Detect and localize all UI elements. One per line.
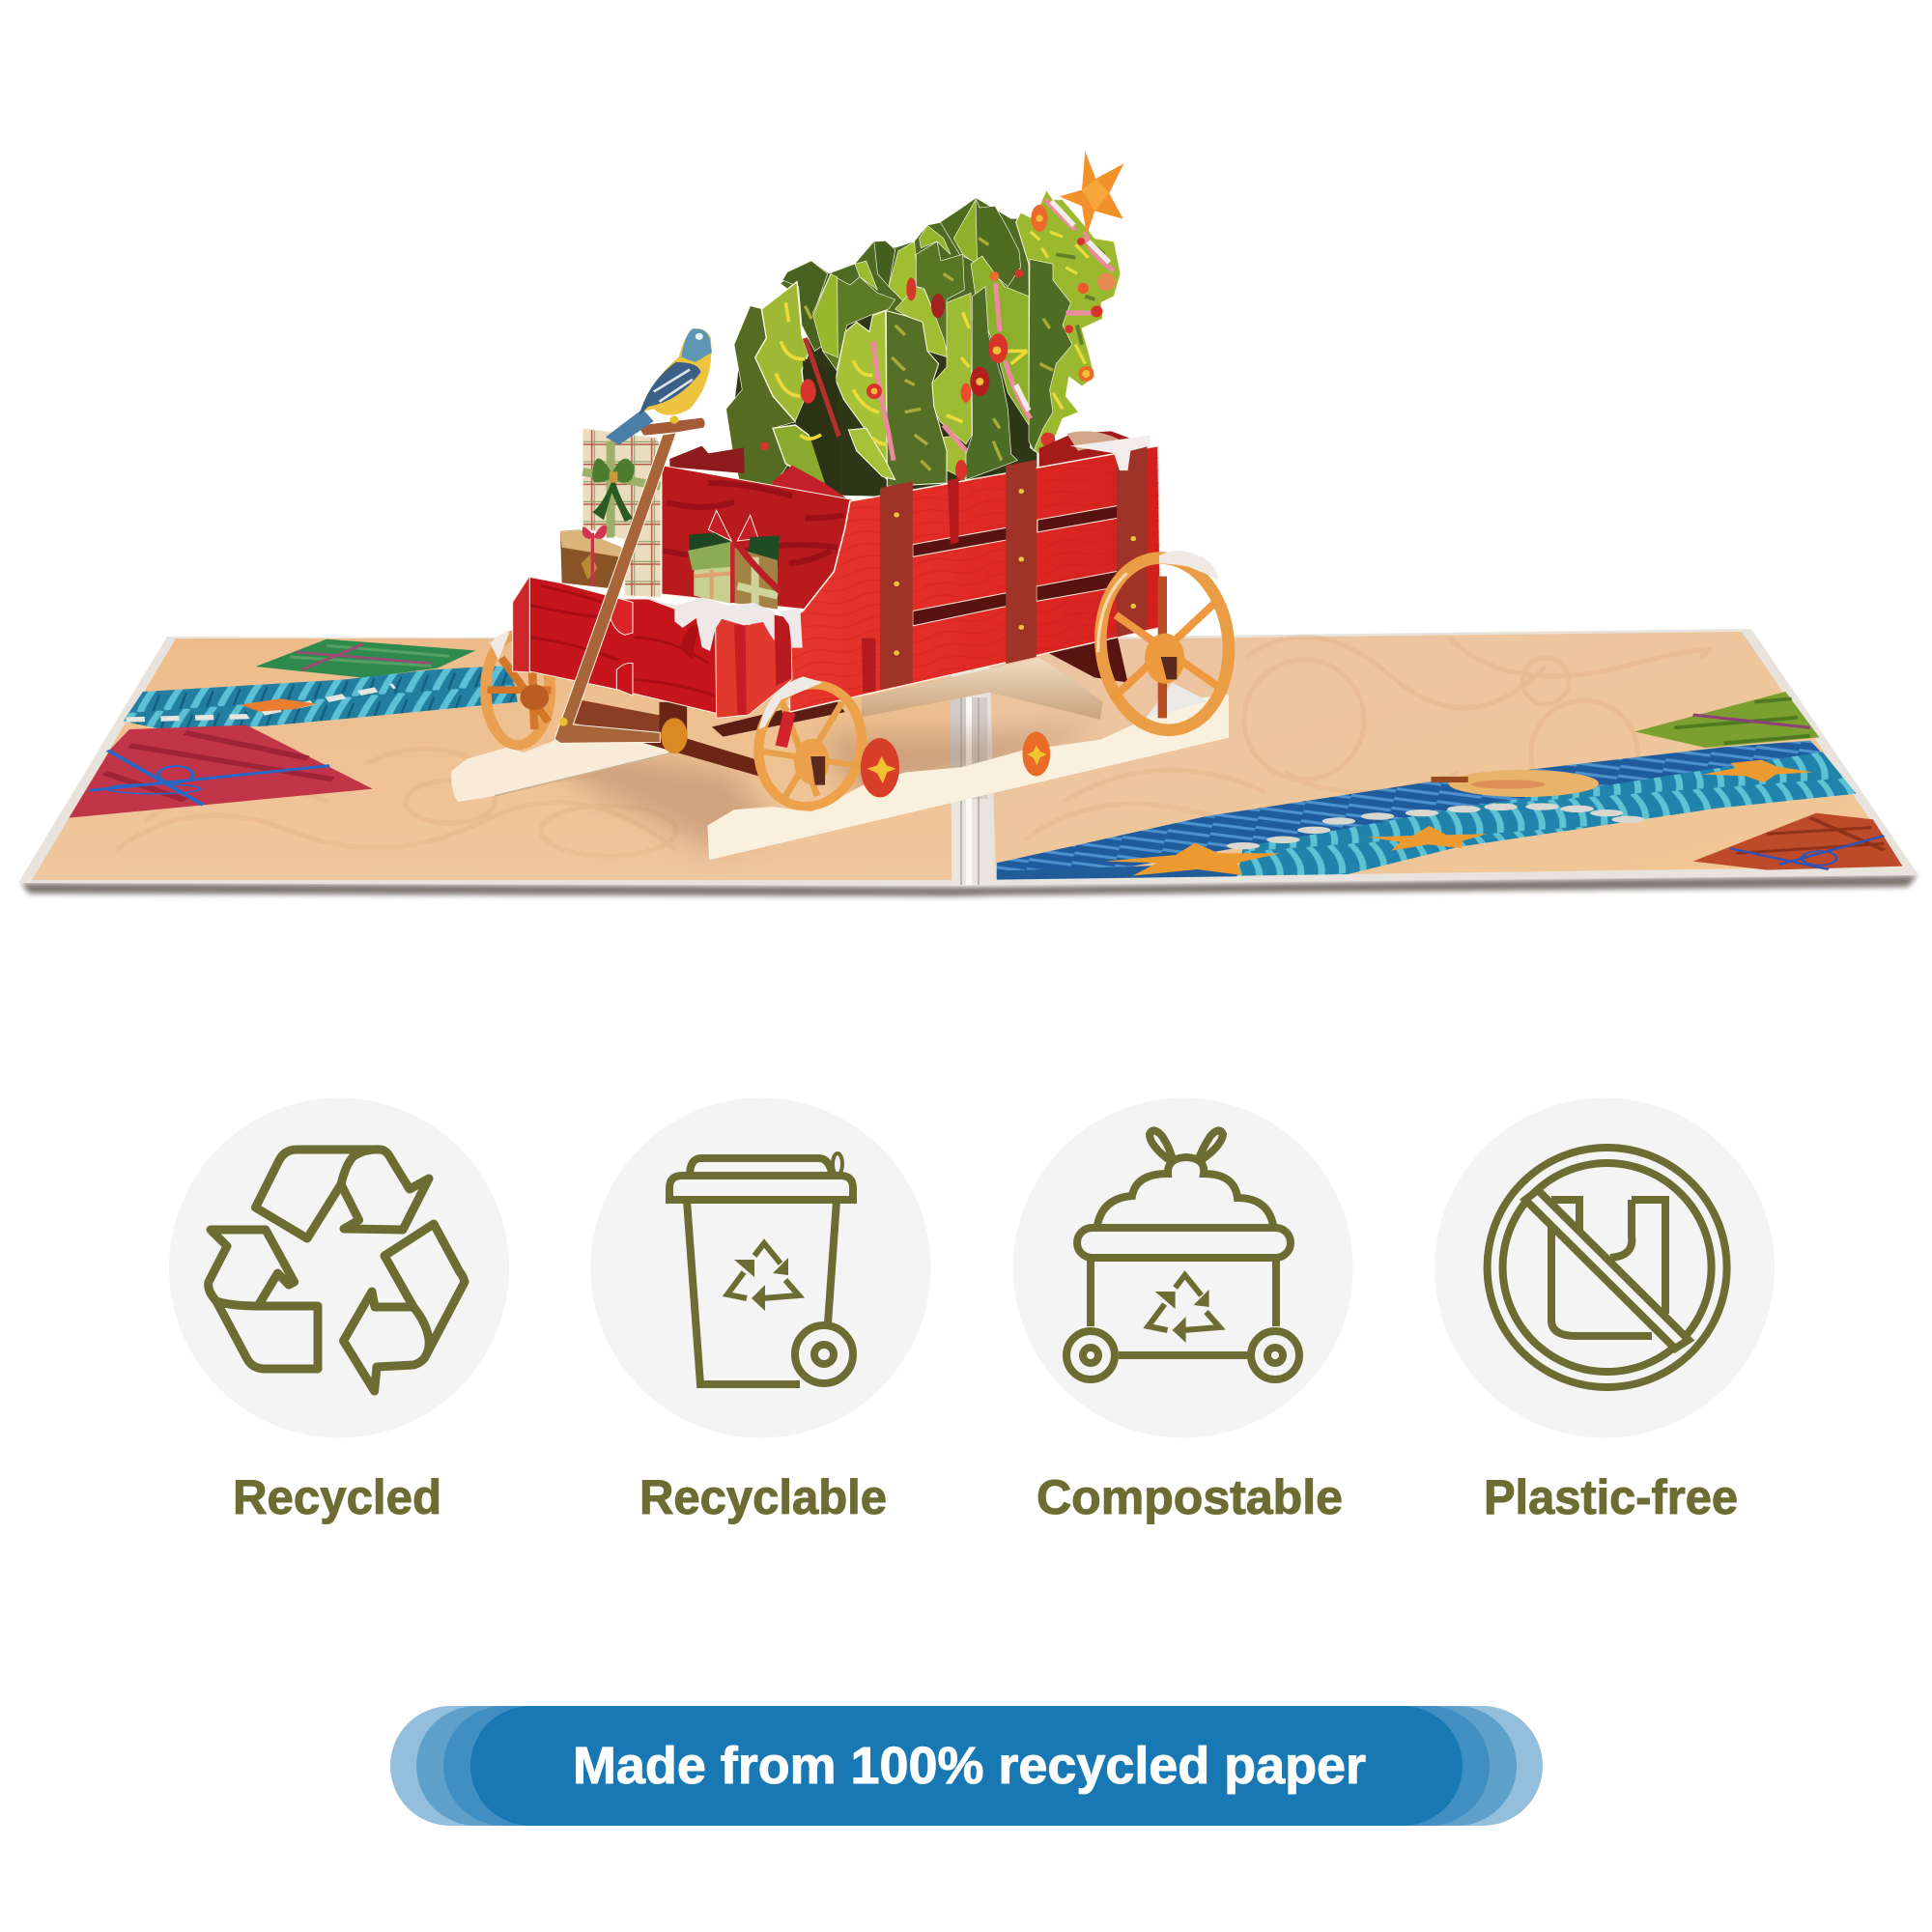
icon: compost bin with bag bbox=[1066, 1130, 1299, 1379]
wagon inner back wall bbox=[662, 446, 860, 615]
banner: made from recycled paper bbox=[390, 1706, 1543, 1826]
label: Plastic-free: Plastic-free bbox=[1484, 1470, 1738, 1524]
wagon far rim bbox=[1039, 431, 1150, 470]
baubles bbox=[760, 205, 1116, 480]
wagon front panel bbox=[513, 576, 803, 718]
rear snowy base bbox=[451, 737, 681, 802]
label: Recyclable: Recyclable bbox=[639, 1470, 887, 1524]
Christmas tree bbox=[726, 152, 1123, 499]
icon: no plastic bag bbox=[1488, 1148, 1727, 1387]
circle bbox=[591, 1097, 931, 1437]
checked gift bbox=[582, 428, 661, 597]
icon: small recycling triangle bbox=[727, 1243, 799, 1311]
wagon axle frame bbox=[561, 697, 845, 779]
badge: recyclable bbox=[591, 1097, 931, 1524]
eco badges row bbox=[169, 1097, 1775, 1524]
slat gaps bbox=[913, 505, 1122, 626]
wagon handle bbox=[554, 418, 705, 743]
panel slots bbox=[609, 596, 633, 635]
front left wheel bbox=[750, 676, 870, 812]
wagon posts bbox=[880, 446, 1148, 690]
green gift bbox=[256, 639, 475, 678]
red gift bbox=[69, 725, 373, 818]
big left leaf bbox=[755, 282, 831, 486]
banner text: Made from 100% recycled paper bbox=[573, 1737, 1366, 1795]
teal garland bbox=[124, 666, 518, 730]
tabs and snow on rim bbox=[948, 478, 958, 545]
shadowed lower tree bbox=[731, 312, 1037, 499]
right card gifts and garland bbox=[997, 692, 1902, 880]
card centre spine bbox=[951, 697, 993, 886]
panel body bbox=[529, 577, 718, 713]
circle bbox=[1435, 1097, 1775, 1437]
ornament ball bbox=[1432, 770, 1599, 797]
card edge bbox=[18, 629, 1918, 886]
green gift bbox=[1634, 692, 1819, 748]
base ornaments bbox=[861, 732, 1050, 797]
pop-up wagon bbox=[451, 152, 1237, 860]
wagon cast shadow bbox=[560, 724, 1101, 850]
right dark leaf bbox=[1029, 259, 1072, 451]
dark centre shadow bbox=[795, 357, 840, 490]
bluetit bird bbox=[606, 328, 712, 445]
red bauble bbox=[861, 738, 899, 797]
right card panel bbox=[989, 632, 1902, 879]
small brown gift bbox=[560, 526, 621, 589]
left card panel bbox=[32, 639, 952, 880]
central front leaf bbox=[930, 287, 1017, 480]
label: Recycled: Recycled bbox=[233, 1470, 441, 1524]
front snowy base bbox=[707, 683, 1229, 860]
pink garland strands bbox=[873, 200, 1114, 461]
red gift bbox=[1693, 813, 1902, 870]
icon: small recycling triangle bbox=[1149, 1275, 1220, 1343]
bright end panel bbox=[716, 609, 792, 718]
badge: recycled bbox=[169, 1097, 509, 1524]
circle bbox=[169, 1097, 509, 1437]
green centre leaf bbox=[971, 256, 1029, 425]
tree tip section bbox=[1016, 190, 1121, 457]
left card gifts and garland bbox=[69, 639, 518, 818]
beads bbox=[1227, 803, 1645, 849]
under-wagon support bbox=[862, 634, 1128, 720]
bauble stars bbox=[871, 214, 1090, 394]
card damask pattern bbox=[116, 637, 1710, 856]
rear gifts bbox=[560, 428, 661, 597]
circle bbox=[1013, 1097, 1353, 1437]
back foliage filler bbox=[781, 198, 1034, 338]
badge: plastic-free bbox=[1435, 1097, 1775, 1524]
snow drift bbox=[646, 597, 775, 651]
open card base bbox=[18, 629, 1918, 886]
blue garland bbox=[997, 741, 1857, 880]
label: Compostable: Compostable bbox=[1037, 1470, 1343, 1524]
rear wagon wheel bbox=[486, 632, 552, 745]
left front leaf bbox=[836, 311, 947, 486]
yellow leaf marks bbox=[776, 302, 1027, 444]
icon: recycling arrows bbox=[209, 1150, 465, 1391]
back dark foliage bbox=[726, 198, 1021, 486]
gift in wagon bbox=[688, 510, 781, 610]
badge: compostable bbox=[1013, 1097, 1353, 1524]
orange bauble bbox=[1022, 732, 1050, 776]
card base shadow bbox=[21, 875, 1918, 896]
gold stars bbox=[1105, 760, 1813, 876]
icon: wheelie bin bbox=[669, 1153, 853, 1384]
panel end flap bbox=[513, 576, 530, 672]
post rivets bbox=[894, 489, 1136, 655]
long wagon side bbox=[789, 435, 1161, 712]
rear right wheel bbox=[1093, 551, 1237, 736]
tip leaf marks bbox=[1031, 232, 1089, 409]
tree top star bbox=[1060, 152, 1123, 235]
